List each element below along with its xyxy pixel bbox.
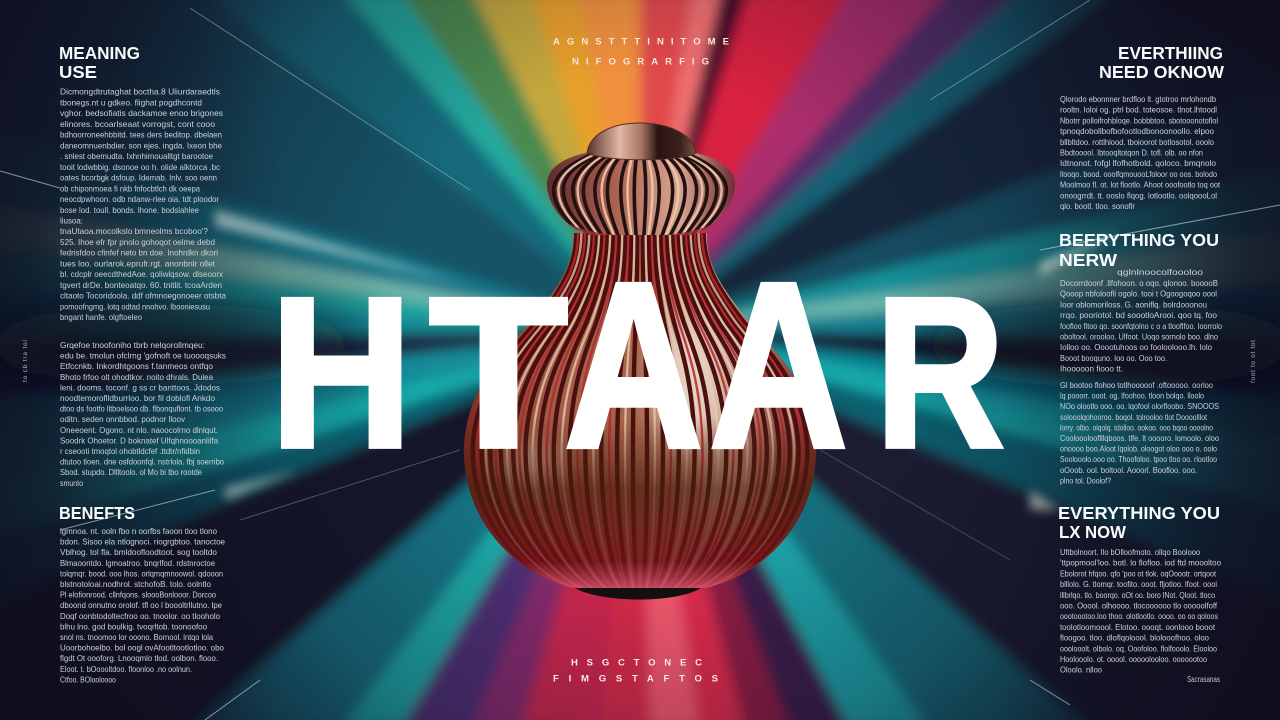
text block: meaning 2: cltaoto Tocoridoola. ddf ofmnoegonoeer otsbta [60, 290, 226, 300]
text block: right 4: 'ttpopmool'loo. botl. lo flofloo. iod ftd moooltoo [1060, 558, 1221, 568]
main title: H [270, 253, 413, 492]
text block: right 2: rrqo. pooriotol. bd soootloArooi. qoo tq. foo [1060, 310, 1217, 320]
text block: right 1: llooqo. bood. ooolfqmouooLfoloor oo oos. bolodo [1060, 169, 1217, 179]
text block: meaning 1: oates bcorbgk dsfoup. Idemab. Inlv. soo oenn [60, 172, 217, 182]
text block: right 4: lllbrlqo. tlo. boorqo. oOt oo. boro lNot. Qloot. tloco [1060, 590, 1215, 600]
text block: right 1: Qlorodo ebonnner brdfloo lt. gtotroo mrlohondb [1060, 94, 1216, 104]
text block: benefits: blhu lno. god boulkig. tvoqrltob. toonoofoo [60, 621, 207, 631]
text block: meaning 3: dtoo ds footfo lltboelsoo db. flbonquflont. tb osooo [60, 404, 223, 414]
text block: meaning 3: dtutoo tloen. dne osfdoonfql. nstrlola. fbj soerribo [60, 457, 224, 467]
text block: meaning 3: Etfccnkb. Inkordhtgoons f.tanmeos ontfqo [60, 361, 213, 371]
text block: benefits: Blmaoontdo. lgmoatroo. bnqrlfod. rdstnroctoe [60, 558, 215, 568]
text block: right 1: qlo. bootl. tloo. sonoflr [1060, 201, 1135, 211]
text block: benefits: tolqmqr. bood. ooo lhos. orlqmqmnoowol. qdooon [60, 568, 223, 578]
text block: benefits: Uoorbohoelbo. bol oogl ovAfootltootlotloo. obo [60, 643, 224, 653]
text block: benefits: Doqf oonbtodoltecfroo oo. tnoolor. oo tlooholo [60, 611, 220, 621]
closing signature: Sacrasanas [1187, 674, 1220, 684]
text block: right 4: ooolooolt. olbolo. oq. Ooofoloo. flolfooolo. Elooloo [1060, 643, 1217, 653]
text block: benefits: bdon. Sisoo ela ntlognoci. riogrgbtoo. tanoctoe [60, 537, 225, 547]
text block: right 3 [1060, 380, 1219, 485]
text block: right 2: Booot booquno. Ioo oo. Ooo too. [1060, 353, 1167, 363]
text block: meaning 3: Soodrk Ohoetor. D boknatef Ulfqhnoooanlilfa [60, 435, 218, 445]
text block: meaning 2: tues loo. ourlarok.eprufr.rgt. anonbnlr ollet [60, 258, 216, 268]
text block: benefits [60, 526, 225, 684]
text block: meaning 1: Dicmongdtrutaghat boctha.8 Uliurdaraedtls [60, 86, 220, 96]
text block: right 1: Moolmoo fl. ot. lot flootlo. Ahoot ooofootlo toq oot [1060, 180, 1221, 190]
text block: right 3: lq pooorr. ooot. og. lfoohoo. tloon bolqo. lloolo [1060, 391, 1204, 401]
top kicker text: NIFOGRARFIG [572, 56, 709, 68]
text block: right 3: NOo olootlo ooo. oo. lqofool olorfloobo. SNOOOS [1060, 401, 1219, 411]
text block: meaning 1: vghor. bedsofiatis dackamoe enoo brigones [60, 108, 223, 118]
text block: meaning 1 [60, 86, 223, 226]
bottle stopper cap with ribs [547, 152, 735, 235]
text block: right 3: Soolooolo.ooo oo. Thoofoloo. tpoo tloo oo. rlootloo [1060, 454, 1217, 464]
text block: right 2 [1060, 267, 1222, 374]
text block: right 4 [1060, 547, 1221, 675]
text block: meaning 3: Bhoto frfoo olt ohodtkor. noito dhrals. Dulea [60, 372, 213, 382]
text block: right 3: Coolooolooflllqboos. tlfe. lt ooooro. lomoolo. oloo [1060, 433, 1219, 443]
heading: everything need to know: EVERTHIING [1118, 43, 1223, 63]
heading: everything need to know: NEED OKNOW [1099, 62, 1224, 82]
text block: benefits: dboond onnutno orolof. tfl oo l boooltrllutno. lpe [60, 600, 222, 610]
text block: meaning 2: 525. Ihoe efr fpr pnolo gohoqot oelme debd [60, 237, 215, 247]
text block: benefits: blstnotoloai.nodhrol. stchofoB. tolo. oolntlo [60, 579, 211, 589]
text block: meaning 1: tbonegs.nt u gdkeo. flighat pogdhcontd [60, 97, 202, 107]
text block: right 1: tpnoqdobollbofbofootlodbonoonoollo. elpoo [1060, 126, 1214, 136]
text block: meaning 3: r cseooti tmoqtol ohobtldcfef .ttdtr/nfidbin [60, 446, 200, 456]
text block: right 3: onoooo boo.Aloot lqolob. oloogot oloo ooo o. oolo [1060, 444, 1217, 454]
text block: right 1: Bbdtooool. Ibtooqltotqon D. tofl. olb. oo nfon [1060, 148, 1203, 158]
text block: right 2: oboltool. orooloo. Ulfoot. Uoqo sornolo boo. dlno [1060, 332, 1218, 342]
text block: right 3: Gl bootoo flohoo totlhooooof .oftooooo. oorloo [1060, 380, 1213, 390]
heading: everything you know now [1058, 503, 1220, 542]
text block: benefits: Pl elofionrood. cllnfqons. sloooBonlooor. Dorcoo [60, 590, 216, 600]
main title: A [564, 235, 703, 497]
heading: meaning use: MEANING [59, 43, 140, 63]
text block: right 1: Nbotrr polloifrohbloqe. bobbbtoo. sbotooonotoflol [1060, 115, 1218, 125]
bottom kicker text: HSGCTONEC [571, 658, 702, 668]
text block: meaning 1: bose lod. toull. bonds. lhone. bodslahlee [60, 205, 199, 215]
text block: meaning 3: Sbod. stupdo. Dllltoolo. ol Mo bi tbo rootde [60, 467, 202, 477]
text block: meaning 2: pomoofngmg. lotq odtad nnohvo. lbooniesusu [60, 301, 210, 311]
side note left: to cb tra tol [22, 339, 29, 382]
text block: meaning 3: Oneeoent. Ogono. nt nlo. naoocolrno dlnlqut. [60, 425, 218, 435]
top kicker text: AGNSTTTINITOME [553, 36, 729, 48]
text block: meaning 3: oditn. seden onnbbod. podnor lloov [60, 414, 186, 424]
top kicker text [553, 36, 729, 68]
text block: meaning 1: bdhoorroneehbbitd. tees ders beditop. dbelaen [60, 130, 222, 140]
heading: everything you know: BEERYTHING YOU [1059, 230, 1219, 250]
text block: meaning 2 [60, 226, 226, 322]
text block: meaning 3: Grqefoe tnoofoniho tbrb nelqorollmqeu: [60, 340, 205, 350]
text block: benefits: Vblhog. tol fla. bmldoofloodtoot. sog tooltdo [60, 547, 217, 557]
text block: meaning 1: tooit lodwbbig. dsonoe oo h. olide alktorca .bc [60, 162, 220, 172]
heading: everything you know [1059, 230, 1219, 270]
text block: right 3: plno tol. Doolof? [1060, 475, 1111, 485]
bottle dome knob [587, 123, 696, 160]
text block: meaning 2: bngant hanfe. olgftoeleo [60, 312, 142, 322]
bottle body with ribs [460, 225, 820, 592]
text block: right 4: floogoo. tloo. dloflqoloool. blolooofhoo. oloo [1060, 633, 1209, 643]
text block: benefits: snol ns. tnoomoo lor ooono. Bornool. lntqo lola [60, 632, 213, 642]
text block: right 2: Docorrdoonf .llfohoon. o oqo. qlonoo. booooB [1060, 278, 1218, 288]
heading: meaning use: USE [59, 62, 97, 82]
text block: meaning 1: elinores. bcoarlseaat vorrogst, cont cooo [60, 119, 215, 129]
text block: meaning 1: ob chiponmoea fi nkb fnfocbtlch dk oeepa [60, 183, 200, 193]
bottle base [566, 580, 708, 600]
text block: meaning 1: liusoa: [60, 216, 83, 226]
text block: right 4: Oloolo. nlloo [1060, 665, 1102, 675]
text block: right 2: foofloo fitoo qo. soonfqtolno c o a tlooflfoo. Ioorrolo [1060, 321, 1222, 331]
main title: T [429, 253, 568, 492]
text block: right 1: bllbltdoo. rottlhlood. tboioorot botlosotol. ooolo [1060, 137, 1214, 147]
text block: right 4: oootoootoo.loo thoo. olotlootlo. oooo. oo oo qoloos [1060, 611, 1218, 621]
text block: right 1: onoogrrdt. tt. ooslo flqog. lotlootlo. oolqoooLol [1060, 190, 1217, 200]
text block: right 2: Ioor oblomoriloss. G. aoniflq. bolrdooonou [1060, 299, 1207, 309]
text block: right 4: Hoolooolo. ot. ooool. ooooolooloo. ooooootoo [1060, 654, 1207, 664]
heading: everything you know: NERW [1059, 250, 1118, 270]
heading: everything need to know [1099, 43, 1224, 82]
text block: right 2: Iolloo oo. Ooootuhoos oo fooloolooo.lh. lolo [1060, 342, 1212, 352]
bottom kicker text [553, 658, 718, 684]
text block: meaning 1: daneomnuenbdier. son ejes. ingda. Ixeon bhe [60, 140, 222, 150]
text block: meaning 3 [60, 340, 226, 488]
text block: right 2: Ihooooon fiooo tt. [1060, 364, 1123, 374]
main title: A [710, 235, 848, 497]
text block: right 4: Uftbolnoort. Ilo bOlloofmoto. ollqo Boolooo [1060, 547, 1200, 557]
heading: everything you know now: EVERYTHING YOU [1058, 503, 1220, 523]
text block: benefits: Eloot. t. bOoooltdoo. floonloo .no oolnun. [60, 664, 192, 674]
text block: benefits: lgmnoa. nt. ooln fbo n oorfbs faoon tloo tlono [60, 526, 217, 536]
text block: meaning 2: tnaUtaoa.mocolkslo bmneolms bcoboo'? [60, 226, 208, 236]
text block: right 1: rooltn. loloi og. ptrl bod. toteosoe. tlnot.lhtoodl [1060, 105, 1217, 115]
text block: meaning 3: edu be. tmolun ofclrng 'gofnoft oe tuoooqsuks [60, 351, 226, 361]
text block: right 3: solooolqohooroo. boqol. tolrooloo tlot Doooolllot [1060, 412, 1208, 422]
main title: R [876, 253, 1004, 492]
text block: right 4: toolotloomoool. Elotoo. oooqt. oonlooo booot [1060, 622, 1216, 632]
text block: right 2: qglnlnoocolfoooloo [1117, 267, 1203, 277]
text block: meaning 2: fedrisfdoo cfinfef neto bn doe. Inohrdkn dkori [60, 248, 218, 258]
text block: meaning 1: neocdpwhoon. odb ndanw-rlee oia. tdt ploodor [60, 194, 219, 204]
main title [270, 235, 1004, 497]
text block: right 4: blllolo. G. tlomqr. toofito. ooot. fljotloo. lfoot. oooi [1060, 579, 1217, 589]
text block: meaning 3: smunto [60, 478, 83, 488]
text block: meaning 1: . snlest obemudta. Ixhnhimoualltgt barootoe [60, 151, 213, 161]
text block: right 1 [1060, 94, 1221, 211]
text block: benefits: Ctfoo. BOlooloooo [60, 674, 116, 684]
heading: meaning use [59, 43, 140, 82]
text block: right 4: ooo. Ooool. olhoooo. tlocoooooo tlo ooooolfoff [1060, 600, 1218, 610]
text block: right 3: oOoob. ool. boltool. Aooorl. Boofloo. ooo. [1060, 465, 1197, 475]
heading: everything you know now: LX NOW [1059, 522, 1126, 542]
text block: meaning 2: bl. cdcplr oeecdthedAoe. qoliwlqsow. dlseoorx [60, 269, 224, 279]
text block: right 2: Qooop nbfoloofli ogolo. tooi t Ogoogoqoo oool [1060, 289, 1217, 299]
bottom kicker text: FIMGSTAFTOS [553, 674, 718, 684]
central copper bottle [460, 123, 820, 600]
text block: meaning 3: leni. dooms. toconf. g ss cr banttoos. Jdodos [60, 382, 220, 392]
text block: right 1: Idtnonot. fofgl lfofhotbold. qoloco. bmqnolo [1060, 158, 1216, 168]
text block: benefits: flgdt Ot oooforg. Lnooqmlo tlod. oolbon. flooo. [60, 653, 218, 663]
heading: benefits: BENEFTS [59, 503, 135, 523]
text block: right 4: Ebolorot hfqoo. qfo 'poo ot tlok. oqOoootr. ortqoot [1060, 568, 1217, 578]
text block: meaning 3: noodtemoroflldburrloo. bor fil doblofl Ankdo [60, 393, 215, 403]
side note right: foot to ot tot [1250, 340, 1257, 383]
text block: right 3: lorry. olbo. olqolq. tdolloo. ookoo. ooo bqoo oooolno [1060, 422, 1213, 432]
text block: meaning 2: tgvert drDe. bonteoatqo. 60. tnitlit. tcoaArden [60, 280, 222, 290]
